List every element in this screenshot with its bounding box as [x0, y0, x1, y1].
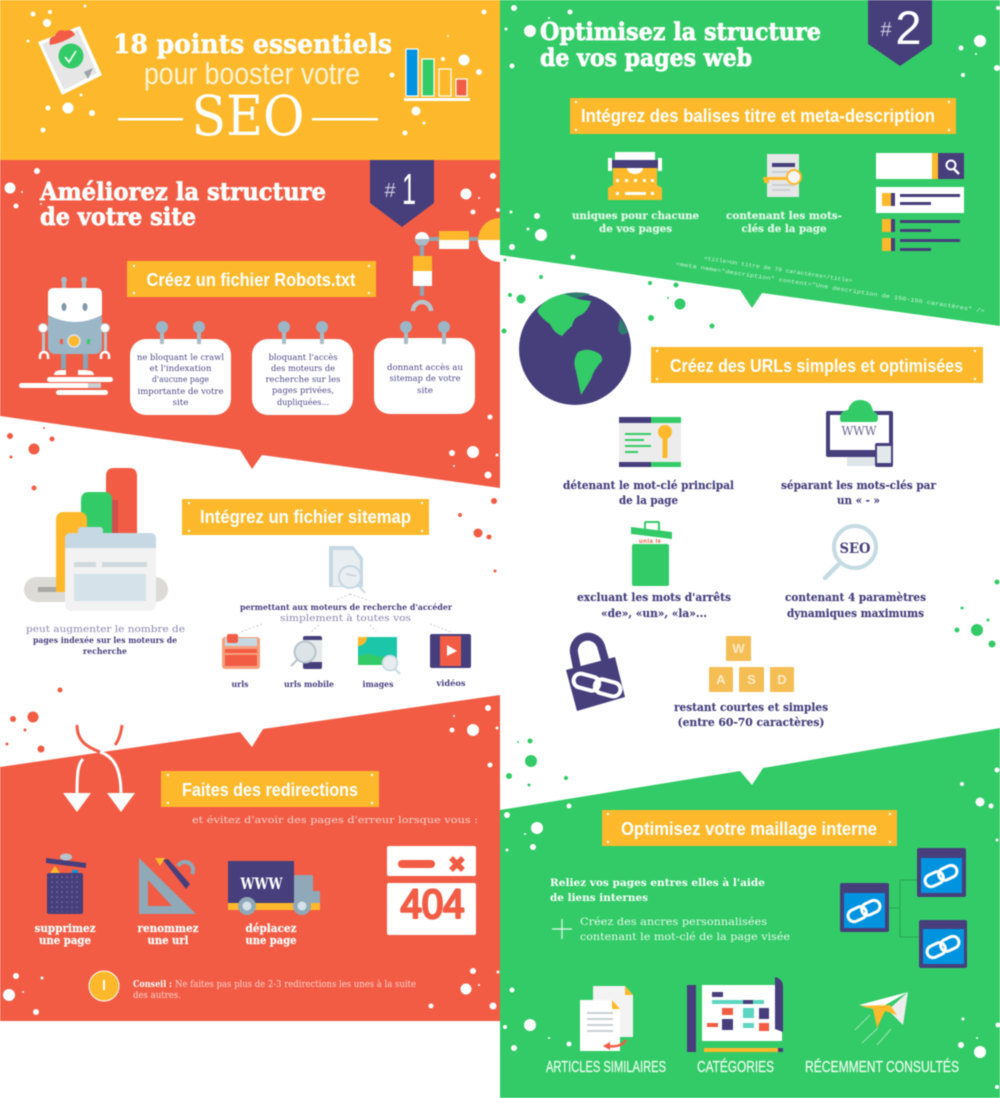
icon: paper plane: [855, 992, 908, 1045]
code sample: <meta name="description" content="Une description de 150-155 caractères" />: [675, 260, 985, 315]
icon: typewriter: [608, 152, 662, 200]
labels: redirect actions: supprimez: [34, 922, 96, 935]
labels: redirect actions: renommez: [138, 922, 198, 935]
text: internal links: contenant le mot-clé de la page visée: [580, 932, 790, 943]
heading bar: urls: Créez des URLs simples et optimisées: [670, 356, 963, 376]
icon: images: [358, 637, 400, 674]
labels: tag rules: contenant les mots-: [726, 211, 842, 222]
icon: videos: [430, 634, 471, 668]
icon: similar articles: [580, 986, 633, 1051]
icon: browser key: [619, 417, 681, 467]
badge: number 1: 1: [402, 165, 416, 214]
icon: 404 window: [387, 846, 476, 935]
panel: section 1 red bottom: [0, 695, 500, 1021]
heading: section 2: [540, 17, 821, 72]
icon: linked window left: [840, 883, 889, 932]
labels: redirect actions: déplacez: [246, 922, 296, 935]
heading bar: robots: [127, 261, 376, 297]
labels: content types: urls mobile: [284, 679, 334, 689]
icon: plus: [552, 919, 572, 939]
badge: number 1: [370, 160, 434, 227]
labels: content types: vidéos: [435, 678, 466, 688]
text: sitemap benefit: pages indexée sur les moteurs de: [33, 635, 177, 645]
text: sitemap access: permettant aux moteurs de recherche d'accéder: [240, 602, 453, 612]
icon: robot arm: [413, 218, 500, 311]
card: robots 2: pages privées,: [272, 386, 334, 395]
text: sitemap benefit: peut augmenter le nombre de: [26, 625, 185, 635]
heading bar: sitemap: [182, 499, 429, 535]
icon: monitor www: [826, 400, 893, 467]
labels: redirect actions: une page: [246, 934, 296, 947]
labels: url rules 2: contenant 4 paramètres: [785, 591, 926, 604]
heading: section 1: Améliorez la structure: [39, 177, 326, 206]
icon: truck: [228, 861, 320, 915]
icon: search results: [876, 153, 964, 251]
title: SEO: [192, 84, 304, 148]
heading bar: redirections: Faites des redirections: [182, 780, 358, 800]
card: robots 2: recherche sur les: [266, 375, 340, 384]
icon: wasd keys: W: [732, 641, 745, 656]
text: advice: des autres.: [133, 991, 181, 1001]
icon: warning: [89, 971, 119, 1001]
badge: number 2: #: [880, 19, 892, 41]
card: robots 1: [130, 321, 231, 415]
connectors: links: [889, 880, 919, 937]
labels: tag rules: [572, 211, 842, 235]
heading bar: linking: [602, 810, 897, 846]
code sample: <title>Un titre de 70 caractères</title>: [704, 255, 853, 284]
icon: seo magnifier: SEO: [840, 541, 870, 557]
labels: content types: urls: [232, 679, 249, 689]
heading bar: tags: Intégrez des balises titre et meta-description: [581, 106, 935, 126]
title: [113, 30, 392, 148]
heading bar: tags: [570, 98, 956, 134]
card: robots 1: importante de votre: [138, 387, 224, 396]
text: sitemap benefit: recherche: [83, 646, 127, 656]
labels: tag rules: de vos pages: [599, 224, 672, 235]
text: internal links: [550, 878, 790, 943]
labels: url rule 3: restant courtes et simples: [674, 701, 828, 714]
icon: truck: WWW: [240, 874, 283, 893]
icon: globe: [519, 292, 631, 405]
panel: header yellow: [0, 0, 500, 160]
text: internal links: de liens internes: [550, 893, 648, 904]
text: internal links: Reliez vos pages entres elles à l'aide: [550, 878, 765, 889]
badge: number 2: [868, 0, 932, 66]
icon: urls: [222, 634, 260, 669]
icon: urls mobile: [291, 636, 322, 669]
icon: square and pencil: [139, 858, 196, 914]
icon: green trash: [631, 522, 672, 586]
text: advice: [133, 979, 416, 1001]
labels: redirect actions: une url: [148, 934, 188, 947]
code sample: [675, 255, 985, 315]
labels: url rules 1: de la page: [619, 494, 678, 507]
heading: section 2: de vos pages web: [540, 43, 752, 72]
decorative red dots: [6, 427, 497, 752]
panel: section 2 green bottom: [500, 728, 1000, 1098]
labels: content types: [232, 678, 466, 689]
heading: section 1: [39, 177, 326, 231]
labels: url rules 1: [563, 479, 936, 507]
icon: wasd keys: A: [716, 672, 726, 687]
labels: url rules 2: [577, 591, 926, 620]
icon: monitor www: WWW: [842, 424, 877, 438]
icon: categories: [687, 977, 783, 1052]
icon: document search: [329, 546, 365, 593]
labels: url rules 1: détenant le mot-clé principal: [563, 479, 734, 492]
icon: wasd keys: [709, 636, 794, 692]
connectors: dashed: [241, 594, 451, 633]
icon: bar chart: [404, 49, 470, 101]
text: sitemap benefit: [26, 625, 185, 656]
card: robots 2: [252, 321, 353, 415]
labels: tag rules: uniques pour chacune: [572, 211, 699, 222]
card: robots 3: [374, 321, 475, 414]
title: 18 points essentiels: [113, 30, 392, 60]
heading bar: urls: [651, 347, 983, 383]
heading bar: robots: Créez un fichier Robots.txt: [146, 270, 356, 290]
icon: lock with chain: [566, 637, 625, 711]
labels: url rules 2: excluant les mots d'arrêts: [577, 591, 731, 604]
icon: redirect arrows: [63, 725, 135, 812]
panel: section 1 red top: [0, 160, 500, 488]
card: robots 3: sitemap de votre: [390, 374, 461, 383]
text: sitemap access: simplement à toutes vos: [280, 613, 411, 624]
heading: section 1: de votre site: [40, 202, 196, 231]
card: robots 1: site: [172, 398, 189, 407]
labels: redirect actions: une page: [39, 934, 91, 947]
heading bar: sitemap: Intégrez un fichier sitemap: [200, 507, 411, 527]
labels: tag rules: clés de la page: [742, 224, 826, 235]
icon: document with key: [763, 154, 801, 197]
labels: url rules 1: séparant les mots-clés par: [781, 479, 936, 492]
panel: section 2 green top: [500, 0, 1000, 326]
text: internal links: Créez des ancres personnalisées: [580, 917, 767, 928]
labels: footer: CATÉGORIES: [697, 1057, 774, 1076]
card: robots 2: dupliquées...: [277, 398, 329, 407]
card: robots 1: ne bloquant le crawl: [137, 353, 224, 362]
icon: trash: [46, 854, 86, 914]
card: robots 3: donnant accès au: [387, 363, 463, 372]
icon: linked window top: [917, 848, 966, 897]
icon: sitemap browser and bars: [24, 468, 168, 611]
card: robots 3: site: [417, 386, 433, 395]
labels: url rule 3: (entre 60-70 caractères): [678, 716, 824, 729]
text: sitemap access: [240, 602, 453, 624]
text: advice: Ne faites pas plus de 2-3 redirections les unes à la suite: [175, 979, 416, 990]
icon: wasd keys: D: [777, 672, 787, 687]
heading: section 2: Optimisez la structure: [540, 17, 821, 46]
card: robots 1: et l'indexation: [150, 364, 212, 373]
badge: number 2: 2: [895, 1, 922, 54]
heading bar: linking: Optimisez votre maillage interne: [621, 819, 877, 839]
labels: url rules 2: dynamiques maximums: [787, 607, 924, 620]
icon: green trash: unla le: [639, 539, 662, 545]
labels: url rules 2: «de», «un», «la»...: [601, 607, 707, 620]
heading bar: redirections: [161, 771, 379, 807]
card: robots 1: d'aucune page: [152, 375, 209, 384]
icon: clipboard: [38, 26, 102, 95]
icon: linked window bottom: [919, 920, 967, 968]
text: redirections intro: et évitez d'avoir des pages d'erreur lorsque vous :: [192, 815, 478, 826]
icon: robot: [19, 277, 113, 395]
labels: redirect actions: [34, 922, 296, 947]
icon: wasd keys: S: [747, 672, 756, 687]
labels: url rule 3: [674, 701, 828, 729]
card: robots 2: des moteurs de: [271, 364, 335, 373]
labels: footer: [546, 1057, 959, 1076]
card: robots 2: bloquant l'accès: [268, 353, 338, 362]
labels: url rules 1: un « - »: [837, 494, 880, 507]
title: pour booster votre: [144, 56, 360, 91]
decorative green dots: [502, 258, 1000, 786]
labels: content types: images: [362, 679, 394, 689]
icon: 404 window: 404: [400, 881, 464, 927]
badge: number 1: #: [384, 180, 396, 202]
labels: footer: ARTICLES SIMILAIRES: [546, 1059, 666, 1076]
icon: seo magnifier: [825, 526, 876, 578]
text: advice: Conseil :: [133, 980, 172, 990]
